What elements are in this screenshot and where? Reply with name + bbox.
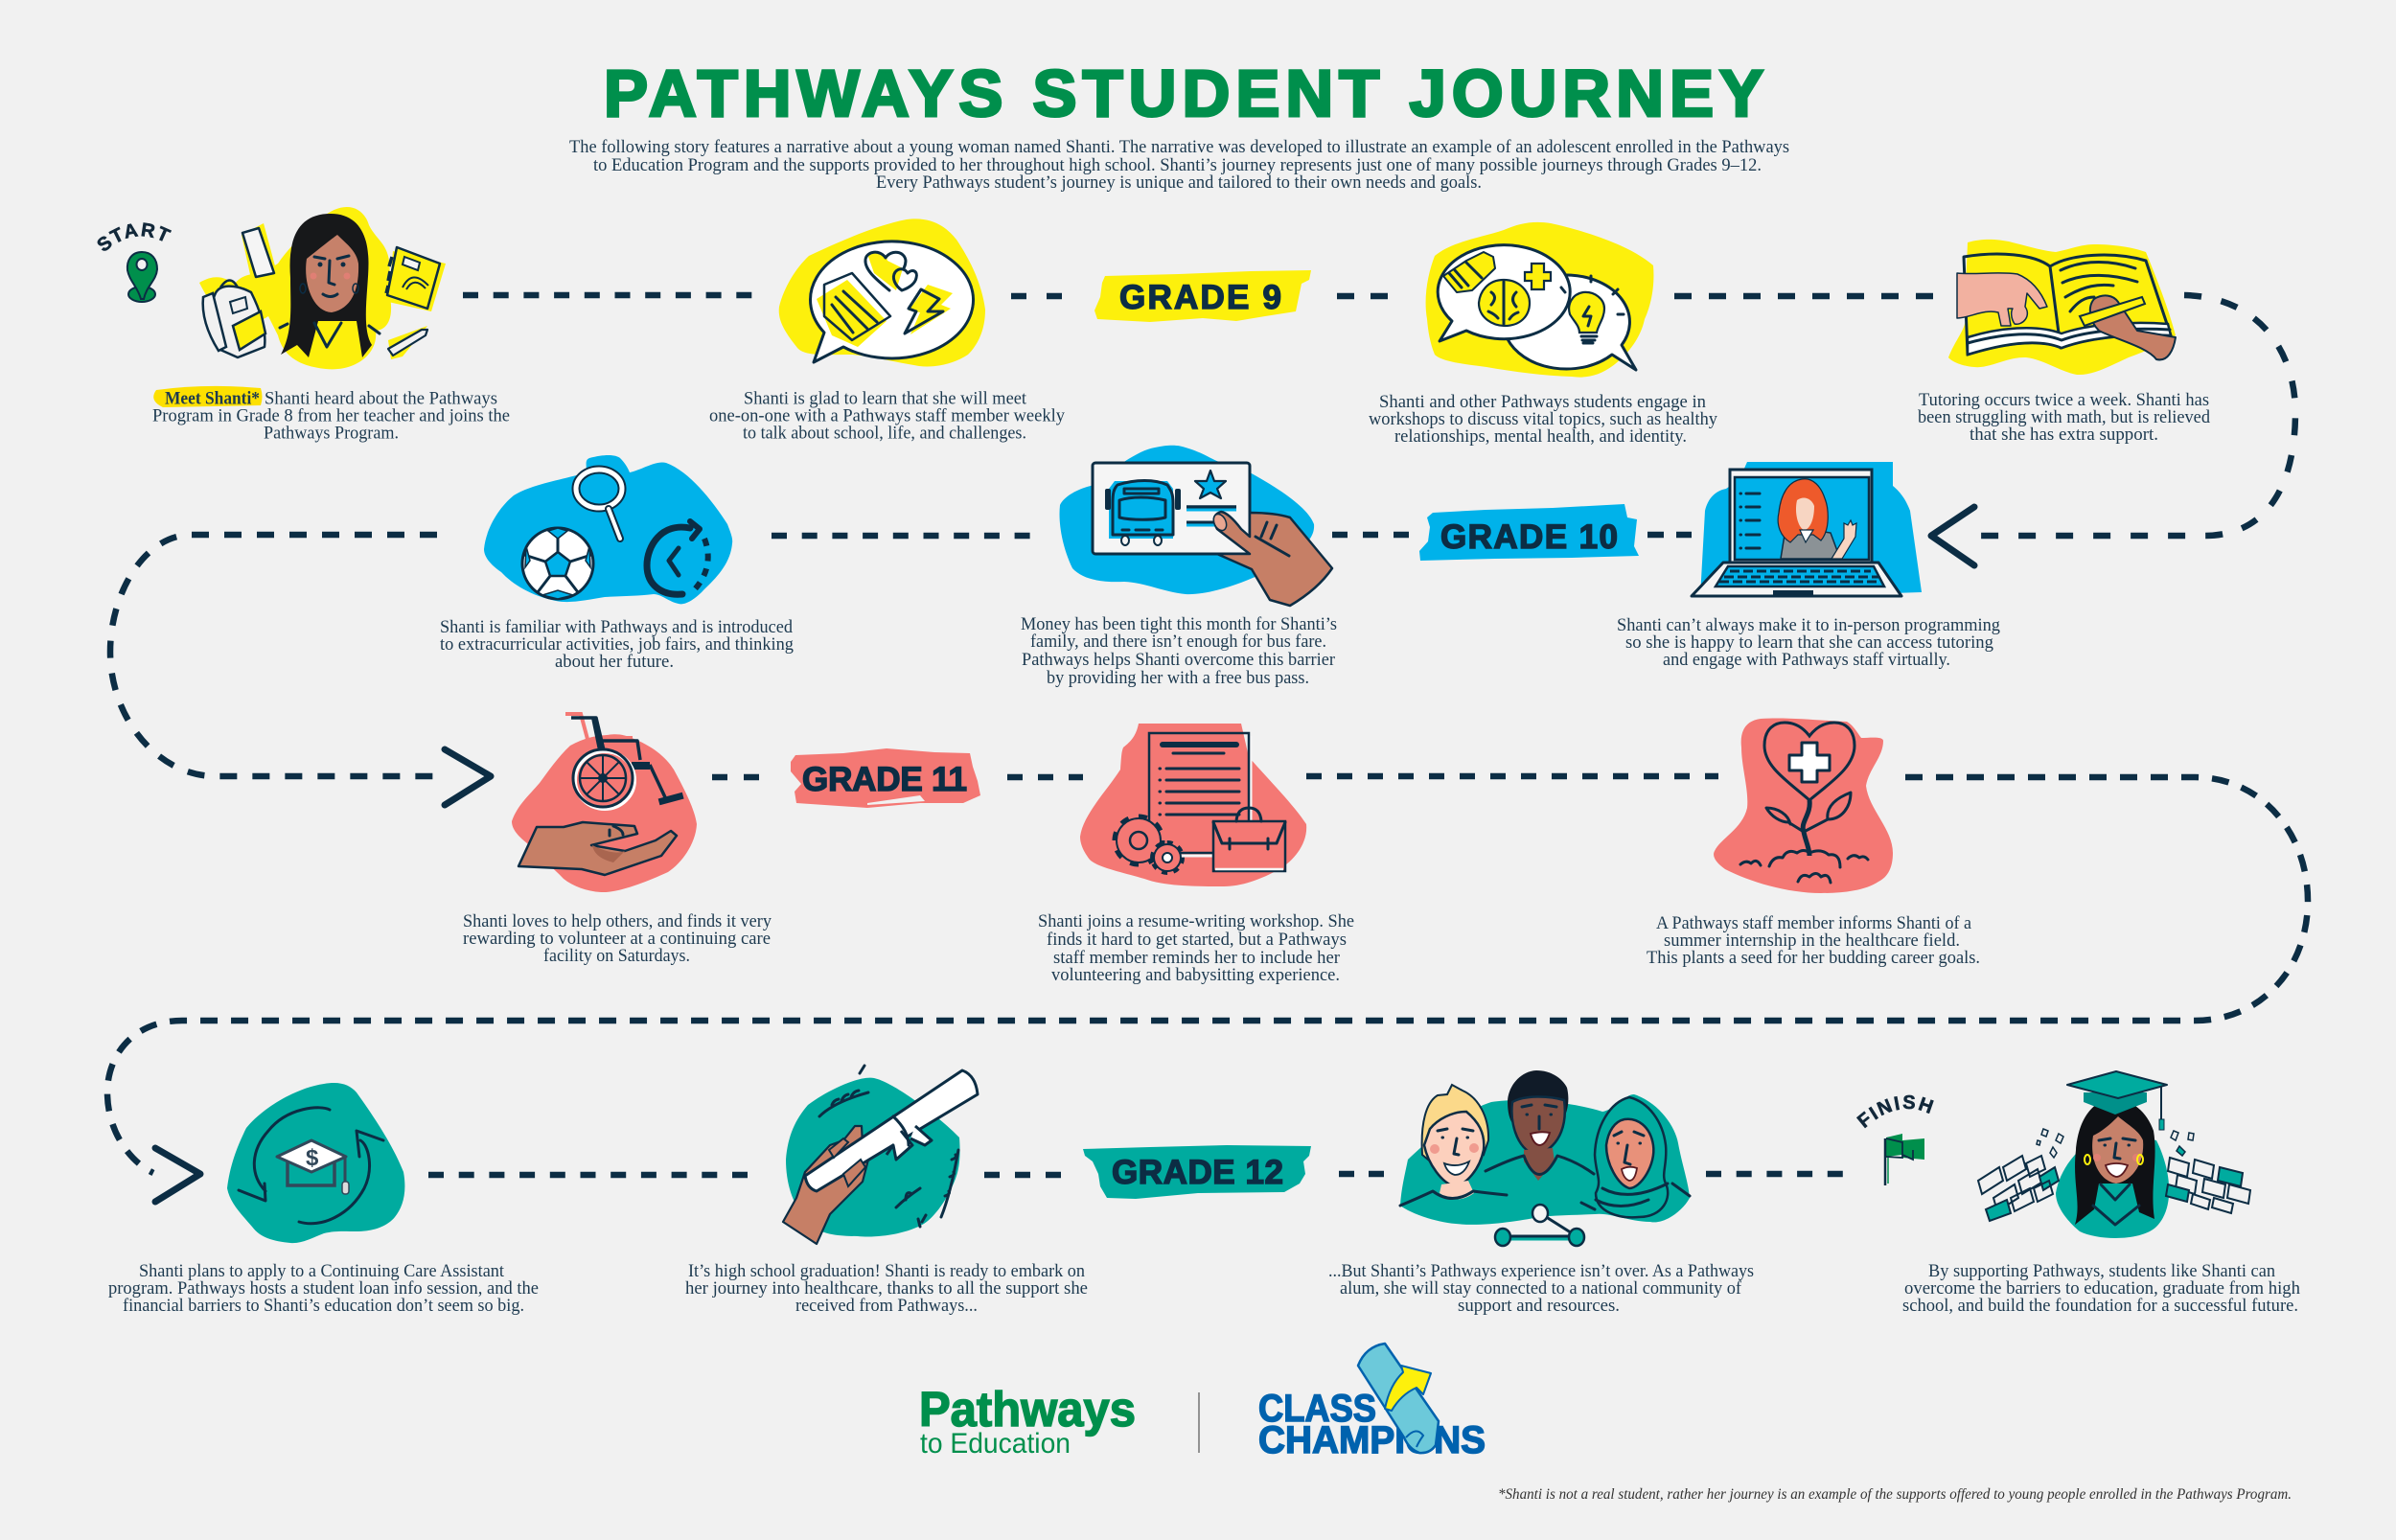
- hair: [2075, 1097, 2155, 1225]
- intro text: to Education Program and the supports provided to her throughout high school. Shanti’s journey represents just one of many possible journeys through Grades 9–12.: [593, 155, 1762, 175]
- text: bus pass: Money has been tight this month for Shanti’s: [1021, 614, 1337, 634]
- laptop base: [1692, 563, 1901, 596]
- arrow: row 2 head: [1931, 507, 1974, 565]
- soccer ball: [522, 528, 593, 599]
- illustration: student loan cap: [227, 1083, 404, 1243]
- illustration: tutoring book with hands: [1948, 240, 2176, 375]
- illustration: graduate Shanti: [1978, 1071, 2250, 1238]
- grade 9 tag: GRADE 9: [1119, 279, 1281, 316]
- gears: [1115, 816, 1183, 873]
- bricks left: [1978, 1156, 2059, 1221]
- icon: start marker: START: [98, 222, 172, 251]
- text: bus pass: [1021, 614, 1337, 688]
- text: extracurriculars: about her future.: [555, 652, 674, 672]
- text: Meet Shanti: Program in Grade 8 from her teacher and joins the: [152, 406, 510, 425]
- light bulb: [1561, 276, 1624, 343]
- divider line: [1198, 1392, 1200, 1453]
- text: student loan: [108, 1261, 539, 1316]
- text: alumni: alum, she will stay connected to a national community of: [1340, 1278, 1742, 1299]
- logo: Class Champions: CHAMPIONS: [1258, 1419, 1486, 1461]
- text: Meet Shanti: [152, 386, 510, 443]
- text: one-on-one: to talk about school, life, and challenges.: [743, 424, 1026, 443]
- intro text: Every Pathways student’s journey is unique and tailored to their own needs and goals.: [876, 172, 1482, 193]
- text: volunteering: facility on Saturdays.: [543, 946, 690, 966]
- text: resume: [1038, 911, 1354, 985]
- star: [1195, 471, 1226, 498]
- illustration: resume workshop: [1080, 724, 1306, 886]
- icon: start marker: [98, 222, 172, 303]
- text: bus pass: by providing her with a free bus pass.: [1047, 668, 1309, 688]
- tutor on screen: [1778, 479, 1856, 559]
- grade 9 tag: [1094, 270, 1311, 322]
- journey path: dashed route: [107, 295, 2308, 1175]
- text: volunteering: rewarding to volunteer at a continuing care: [463, 929, 771, 949]
- face: [2092, 1116, 2143, 1184]
- text: tutoring: [1918, 390, 2210, 445]
- text: internship: This plants a seed for her budding career goals.: [1647, 948, 1980, 968]
- illustration: one-on-one speech bubble: [779, 218, 985, 366]
- grade 11 tag: [791, 748, 980, 808]
- open hand: [518, 822, 677, 875]
- text: internship: [1647, 913, 1980, 968]
- hand holding card: [1214, 512, 1332, 606]
- illustration: volunteering wheelchair and hand: [512, 714, 697, 892]
- title: PATHWAYS STUDENT JOURNEY: [604, 57, 1763, 130]
- text: tutoring: that she has extra support.: [1970, 425, 2158, 445]
- bricks right: [2166, 1158, 2250, 1213]
- face: [306, 235, 358, 312]
- text: bus pass: family, and there isn’t enough for bus fare.: [1030, 632, 1326, 652]
- lightning: [909, 285, 953, 334]
- text: tutoring: been struggling with math, but is relieved: [1918, 407, 2210, 427]
- hair: [281, 214, 372, 357]
- magnifier: [576, 470, 622, 539]
- text: resume: staff member reminds her to include her: [1053, 948, 1341, 968]
- notebook: [386, 247, 440, 309]
- plus: [1525, 264, 1551, 289]
- text: tutoring: Tutoring occurs twice a week. Shanti has: [1919, 390, 2209, 410]
- graduation cap: [2067, 1071, 2167, 1130]
- confetti: [2037, 1129, 2194, 1158]
- person: dark hair: [1486, 1070, 1594, 1181]
- illustration: alumni community: [1400, 1070, 1690, 1246]
- resume page: [1149, 733, 1251, 856]
- hand with scroll: [783, 1126, 868, 1244]
- text: resume: Shanti joins a resume-writing workshop. She: [1038, 911, 1354, 931]
- grade 12 tag: GRADE 12: [1112, 1154, 1283, 1191]
- arrow: row 3 head: [445, 749, 491, 805]
- logo: Class Champions: CLASS: [1258, 1388, 1376, 1430]
- handshake: [1443, 252, 1495, 292]
- text: virtual access: so she is happy to learn that she can access tutoring: [1625, 632, 1993, 653]
- illustration: graduation diploma: [783, 1066, 978, 1244]
- text: volunteering: [463, 911, 772, 966]
- phone: [242, 228, 274, 277]
- text: Meet Shanti: Pathways Program.: [264, 424, 399, 443]
- text: graduation: her journey into healthcare, thanks to all the support she: [685, 1278, 1088, 1299]
- text: extracurriculars: to extracurricular activities, job fairs, and thinking: [440, 634, 794, 655]
- text: virtual access: Shanti can’t always make it to in-person programming: [1617, 615, 2000, 635]
- grade 10 tag: GRADE 10: [1440, 518, 1618, 556]
- illustration: bus pass: [1060, 446, 1332, 606]
- text: student loan: program. Pathways hosts a student loan info session, and the: [108, 1278, 539, 1299]
- logo: Pathways to Education: [919, 1382, 1136, 1460]
- intro text: [569, 137, 1789, 193]
- pencil: [388, 330, 427, 356]
- illustration: student loan cap: $: [306, 1145, 319, 1171]
- wheelchair: [565, 714, 684, 809]
- footnote: *Shanti is not a real student, rather her journey is an example of the supports offered to young people enrolled in the Pathways Program.: [1498, 1486, 2292, 1503]
- text: closing: By supporting Pathways, students like Shanti can: [1928, 1261, 2275, 1281]
- text: volunteering: Shanti loves to help others, and finds it very: [463, 911, 772, 931]
- text: closing: school, and build the foundation for a successful future.: [1902, 1296, 2298, 1316]
- intro text: The following story features a narrative about a young woman named Shanti. The narrative was developed to illustrate an example of an adolescent enrolled in the Pathways: [569, 137, 1789, 157]
- grade 11 tag: GRADE 11: [802, 761, 967, 798]
- text: workshops: relationships, mental health, and identity.: [1394, 426, 1687, 447]
- text: internship: summer internship in the healthcare field.: [1664, 931, 1960, 951]
- text: internship: A Pathways staff member informs Shanti of a: [1656, 913, 1972, 933]
- text: alumni: support and resources.: [1458, 1296, 1620, 1316]
- text: workshops: workshops to discuss vital topics, such as healthy: [1369, 409, 1717, 429]
- text: one-on-one: one-on-one with a Pathways staff member weekly: [709, 406, 1065, 425]
- grade 10 tag: [1419, 504, 1639, 561]
- text: student loan: financial barriers to Shanti’s education don’t seem so big.: [123, 1296, 524, 1316]
- icon: finish flag: [1856, 1094, 1934, 1185]
- text: graduation: It’s high school graduation! Shanti is ready to embark on: [688, 1261, 1085, 1281]
- person: hijab: [1581, 1097, 1690, 1217]
- brain: [1479, 280, 1530, 326]
- text: virtual access: and engage with Pathways staff virtually.: [1663, 650, 1950, 670]
- icon: finish flag: FINISH: [1856, 1094, 1934, 1129]
- logo: Pathways to Education: to Education: [920, 1428, 1071, 1460]
- left hand: [1957, 273, 2047, 326]
- illustration: Shanti with school items: [199, 207, 446, 369]
- text: virtual access: [1617, 615, 2000, 670]
- logo: Class Champions: [1258, 1344, 1486, 1461]
- text: graduation: [685, 1261, 1088, 1316]
- text: workshops: [1369, 392, 1717, 447]
- text: Meet Shanti: Meet Shanti*: [165, 389, 260, 408]
- illustration: workshops speech bubbles: [1426, 222, 1653, 378]
- backpack: [203, 280, 265, 357]
- text: closing: overcome the barriers to education, graduate from high: [1904, 1278, 2300, 1299]
- text: student loan: Shanti plans to apply to a Continuing Care Assistant: [139, 1261, 505, 1281]
- text: extracurriculars: [440, 617, 794, 672]
- text: alumni: [1328, 1261, 1754, 1316]
- briefcase: [1213, 808, 1285, 871]
- illustration: plant with heart: [1714, 718, 1893, 893]
- hearts: [865, 252, 916, 290]
- person: blond: [1400, 1085, 1507, 1206]
- text: alumni: ...But Shanti’s Pathways experience isn’t over. As a Pathways: [1328, 1261, 1754, 1281]
- network icon: [1495, 1205, 1584, 1246]
- text: closing: [1902, 1261, 2300, 1316]
- text: graduation: received from Pathways...: [795, 1296, 978, 1316]
- illustration: extracurriculars: [484, 455, 732, 604]
- text: workshops: Shanti and other Pathways students engage in: [1379, 392, 1706, 412]
- text: bus pass: Pathways helps Shanti overcome this barrier: [1022, 650, 1336, 670]
- bus: [1105, 481, 1181, 545]
- right hand with pencil: [2090, 295, 2176, 359]
- illustration: laptop virtual tutoring: [1692, 462, 1922, 597]
- arrow: row 4 head: [155, 1148, 200, 1202]
- document: [817, 273, 890, 347]
- text: Meet Shanti: Shanti heard about the Pathways: [265, 389, 497, 408]
- grade 12 tag: [1083, 1145, 1311, 1199]
- text: resume: finds it hard to get started, but a Pathways: [1047, 930, 1347, 950]
- clock arrow: [647, 521, 708, 594]
- text: one-on-one: Shanti is glad to learn that she will meet: [744, 389, 1027, 408]
- logo: Pathways to Education: Pathways: [919, 1382, 1136, 1437]
- text: one-on-one: [709, 389, 1065, 443]
- text: extracurriculars: Shanti is familiar with Pathways and is introduced: [440, 617, 793, 637]
- text: resume: volunteering and babysitting experience.: [1051, 965, 1340, 985]
